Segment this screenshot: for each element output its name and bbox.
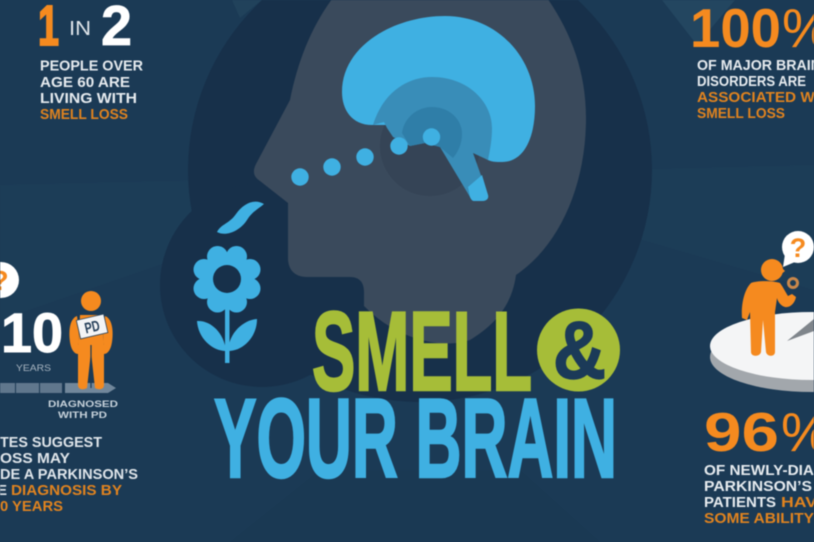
text: newly diagnosed: SOME ABILITY: [704, 510, 814, 527]
icon: question bubble: [0, 262, 19, 298]
text: newly diagnosed: OF NEWLY-DIA: [704, 462, 814, 479]
label: years: YEARS: [16, 363, 51, 374]
title: [214, 289, 620, 501]
panel: 100 percent: [690, 0, 814, 122]
text: estimates suggest: [0, 434, 138, 515]
text: newly diagnosed: PATIENTS: [704, 494, 776, 511]
text: people over 60: PEOPLE OVER: [40, 58, 143, 74]
brain group: [342, 16, 535, 201]
icon: flower: [194, 246, 260, 363]
brain inner ring: [402, 107, 462, 158]
icon: question bubble: [782, 231, 814, 267]
text: estimates suggest: OSS MAY: [0, 450, 70, 467]
heading: smell: SMELL: [312, 289, 532, 414]
badge: ampersand: &: [553, 305, 606, 396]
text: newly diagnosed: [704, 462, 814, 527]
text: newly diagnosed: HAV: [781, 494, 814, 511]
stat: 1 in 2: IN: [69, 18, 91, 40]
text: people over 60: AGE 60 ARE: [40, 74, 130, 91]
text: estimates suggest: TES SUGGEST: [0, 434, 102, 451]
label: diagnosed with pd: WITH PD: [58, 410, 107, 421]
text: estimates suggest: DIAGNOSIS BY: [11, 482, 122, 499]
brain outer: [342, 16, 535, 162]
text: major brain disorders: ASSOCIATED WI: [697, 89, 814, 106]
stat: 10: 10: [1, 301, 63, 364]
brain stem tip: [468, 175, 488, 201]
text: estimates suggest: DE A PARKINSON’S: [0, 466, 138, 483]
stat: 96%: [704, 401, 814, 463]
label: diagnosed with pd: DIAGNOSED: [48, 399, 118, 410]
text: people over 60: [40, 58, 143, 123]
icon: scent wisp: [217, 202, 264, 234]
label: diagnosed with pd: [48, 399, 118, 421]
head silhouette: [254, 0, 586, 343]
olfactory shadow: [380, 96, 480, 196]
panel: 1 in 2: [38, 0, 143, 123]
icon: person smelling flower: [742, 259, 798, 356]
text: people over 60: SMELL LOSS: [40, 106, 128, 123]
timeline arrow: [0, 383, 116, 393]
icon: question bubble: ?: [790, 233, 806, 263]
icon: person with pd sign: [69, 291, 113, 389]
stat: 1 in 2: [38, 0, 132, 58]
head halo: [160, 0, 652, 402]
text: newly diagnosed: PARKINSON’S: [704, 478, 812, 495]
pd sign: PD: [83, 317, 102, 337]
panel: 10 years: [0, 262, 138, 515]
text: major brain disorders: SMELL LOSS: [697, 105, 785, 122]
scent dots: [291, 128, 440, 186]
text: major brain disorders: [697, 57, 814, 122]
pie chart: [710, 312, 814, 392]
text: people over 60: LIVING WITH: [40, 90, 137, 107]
panel: 96 percent: [704, 231, 814, 527]
stat: 96%: 96: [704, 401, 779, 463]
brain middle ring and stem: [373, 77, 492, 201]
text: estimates suggest: 0 YEARS: [0, 498, 63, 515]
